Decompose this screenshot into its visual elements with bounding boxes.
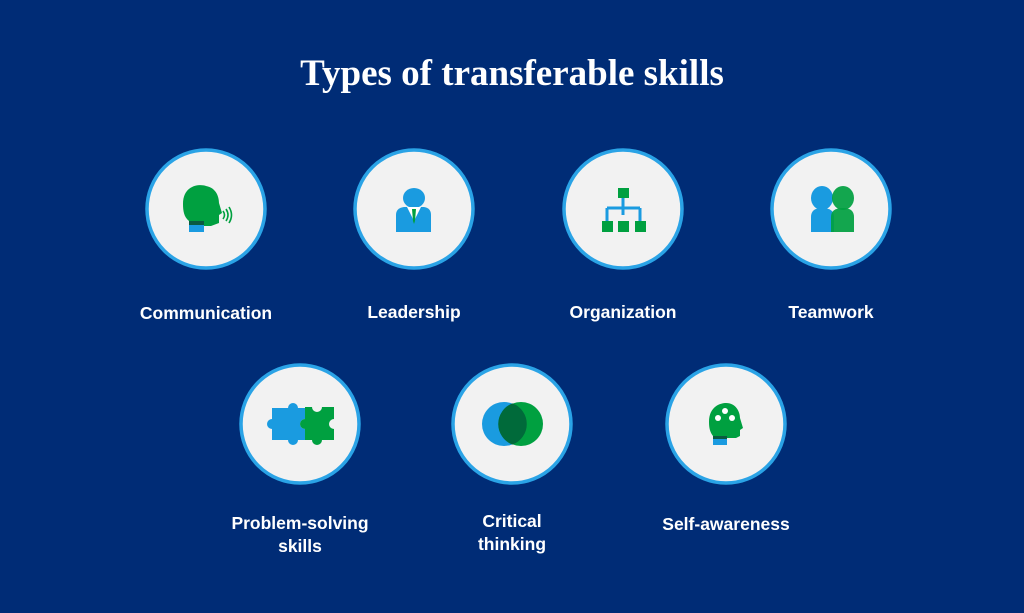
icon: communication xyxy=(145,148,267,270)
icon: teamwork xyxy=(770,148,892,270)
label: organization: Organization xyxy=(570,302,676,322)
icon: leadership xyxy=(353,148,475,270)
label: critical thinking xyxy=(478,511,546,554)
label: critical thinking: Critical xyxy=(482,511,542,531)
label: communication: Communication xyxy=(140,303,272,323)
label: leadership: Leadership xyxy=(367,302,461,322)
label: self-awareness: Self-awareness xyxy=(662,514,790,534)
label: critical thinking: thinking xyxy=(478,534,546,554)
title: Types of transferable skills xyxy=(300,53,724,94)
label: problem-solving skills xyxy=(231,513,369,556)
icon: organization xyxy=(562,148,684,270)
label: teamwork: Teamwork xyxy=(788,302,874,322)
label: problem-solving skills: skills xyxy=(278,536,322,556)
icon: self-awareness xyxy=(665,363,787,485)
icon: critical thinking venn xyxy=(451,363,573,485)
icon: problem-solving puzzle xyxy=(239,363,361,485)
label: problem-solving skills: Problem-solving xyxy=(231,513,369,533)
